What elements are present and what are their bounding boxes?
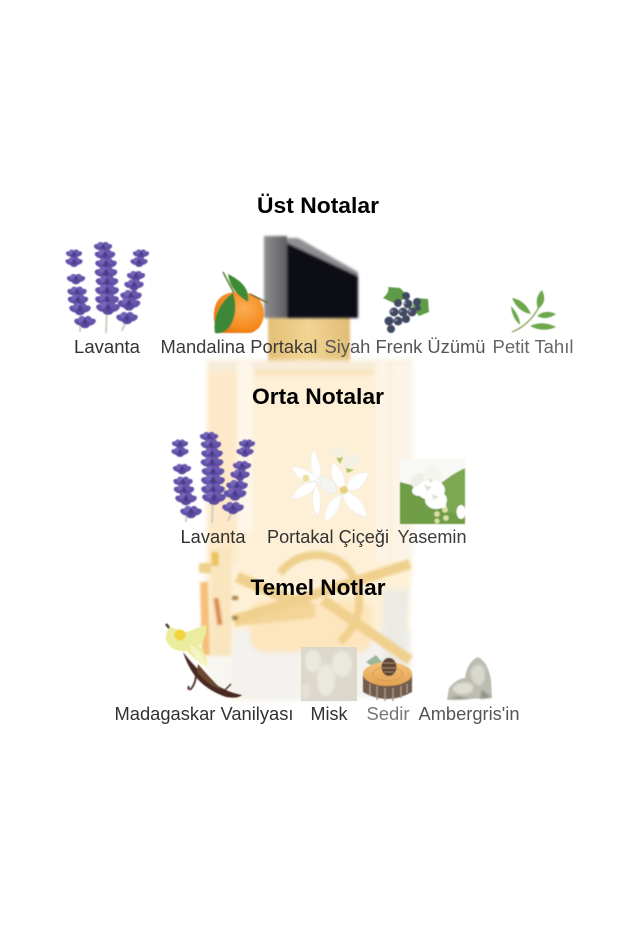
icon: jasmine	[400, 459, 466, 524]
bottle collar	[268, 316, 350, 364]
label: Lavanta: Lavanta	[74, 337, 141, 357]
icon: ambergris rock	[447, 657, 492, 700]
label: Portakal Çiçeği: Portakal Çiçeği	[267, 527, 389, 547]
label: Siyah Frenk Üzümü: Siyah Frenk Üzümü	[324, 337, 486, 357]
bottle body	[204, 360, 413, 701]
icon: blackcurrant	[383, 287, 429, 333]
icon: petitgrain leaves	[511, 290, 556, 332]
icon: vanilla	[166, 624, 242, 698]
icon: cedar log	[363, 655, 412, 701]
icon: mandarin orange	[214, 272, 268, 333]
icon: lavender top	[65, 242, 150, 333]
gold logo on bottle	[199, 548, 410, 660]
label: Lavanta: Lavanta	[180, 527, 246, 547]
heading: middle notes: Orta Notalar	[252, 384, 384, 409]
icon: musk	[301, 647, 357, 701]
heading: base notes: Temel Notlar	[250, 575, 386, 600]
bottle cap	[264, 236, 358, 318]
label: Sedir: Sedir	[366, 704, 410, 724]
icon: orange blossom	[291, 446, 369, 522]
label: Petit Tahıl: Petit Tahıl	[492, 337, 574, 357]
heading: top notes: Üst Notalar	[257, 193, 379, 218]
label: Ambergris'in: Ambergris'in	[418, 704, 520, 724]
blurred perfume bottle	[199, 236, 413, 701]
label: Mandalina Portakal: Mandalina Portakal	[160, 337, 318, 357]
label: Misk: Misk	[310, 704, 348, 724]
icon: lavender middle	[171, 432, 256, 523]
label: Madagaskar Vanilyası: Madagaskar Vanilyası	[114, 704, 294, 724]
label: Yasemin: Yasemin	[398, 527, 466, 547]
